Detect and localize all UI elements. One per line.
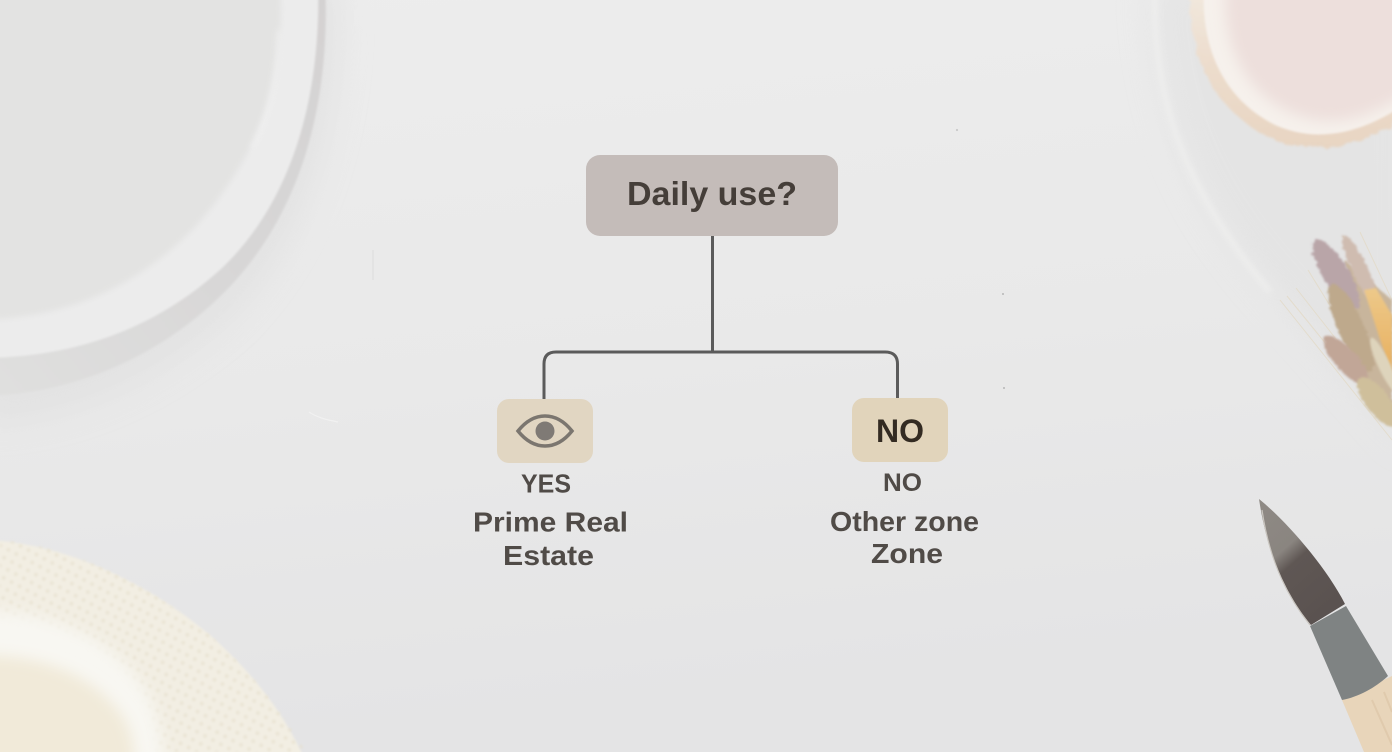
decoration: dried wheat <box>1280 232 1392 440</box>
label: NO Other zone Zone: Zone <box>871 538 943 569</box>
node: NO tile: NO <box>876 413 924 449</box>
flowchart: decision tree <box>473 155 979 571</box>
label: YES Prime Real Estate: Prime Real <box>473 506 628 538</box>
node: Daily use? question <box>586 155 838 236</box>
label: NO Other zone Zone: NO <box>883 469 922 497</box>
label: NO Other zone Zone <box>830 469 979 569</box>
label: YES Prime Real Estate: Estate <box>503 540 594 571</box>
node: NO tile <box>852 398 948 462</box>
decoration: woven hat <box>0 540 306 752</box>
decoration: brush with metal tip <box>1259 499 1392 752</box>
node: Daily use? question: Daily use? <box>627 175 797 212</box>
decoration: white plate <box>0 0 341 424</box>
label: YES Prime Real Estate: YES <box>521 468 571 498</box>
node: YES eye icon tile <box>497 399 593 463</box>
label: NO Other zone Zone: Other zone <box>830 506 979 537</box>
connector lines <box>544 236 898 399</box>
label: YES Prime Real Estate <box>473 468 628 571</box>
decoration: pink soap on sponge <box>1189 0 1392 148</box>
